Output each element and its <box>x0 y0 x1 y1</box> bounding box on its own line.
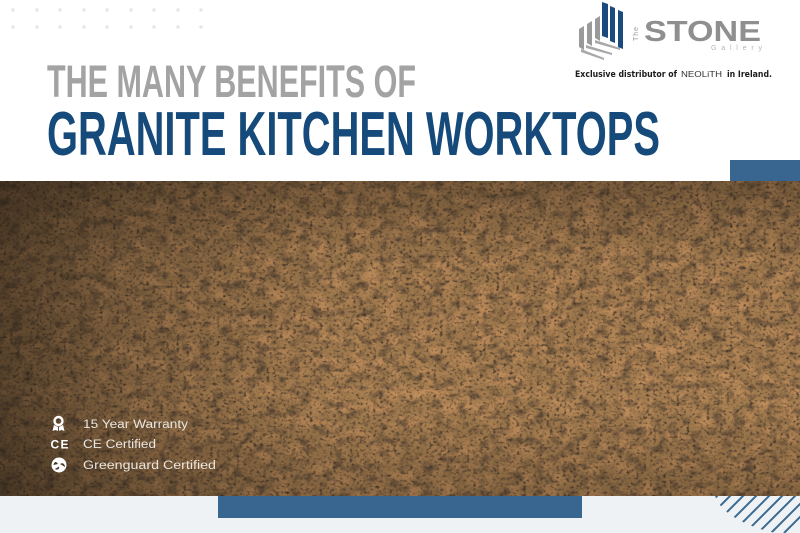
icon: award ribbon <box>52 417 64 431</box>
logo: The Stone Gallery: STONE <box>644 16 761 48</box>
icon: CE mark: C <box>50 438 60 452</box>
blue accent bar top right <box>730 160 800 181</box>
granite photo panel <box>0 181 800 496</box>
logo: The Stone Gallery <box>575 2 772 80</box>
label: greenguard certified: Greenguard Certified <box>83 460 216 472</box>
hatch pattern bottom right <box>715 496 800 533</box>
icon: CE mark: E <box>60 438 69 452</box>
title: THE MANY BENEFITS OF <box>47 56 416 107</box>
distributor tagline: Exclusive distributor of <box>575 70 677 80</box>
logo mark: stone pillars <box>579 2 623 60</box>
icon: greenguard <box>52 458 66 472</box>
title <box>47 56 660 169</box>
logo: The Stone Gallery: Gallery <box>711 45 762 52</box>
icon: CE mark <box>50 438 69 452</box>
bottom band <box>0 496 800 533</box>
blue accent bar bottom <box>218 496 582 518</box>
distributor tagline: NEOLiTH <box>681 69 722 79</box>
logo wordmark: The <box>633 26 640 41</box>
distributor tagline: in Ireland. <box>727 70 772 80</box>
label: warranty: 15 Year Warranty <box>83 419 188 431</box>
decorative dot grid <box>11 8 203 29</box>
certifications list <box>50 417 216 472</box>
label: CE certified: CE Certified <box>83 439 156 451</box>
distributor tagline <box>575 69 772 80</box>
